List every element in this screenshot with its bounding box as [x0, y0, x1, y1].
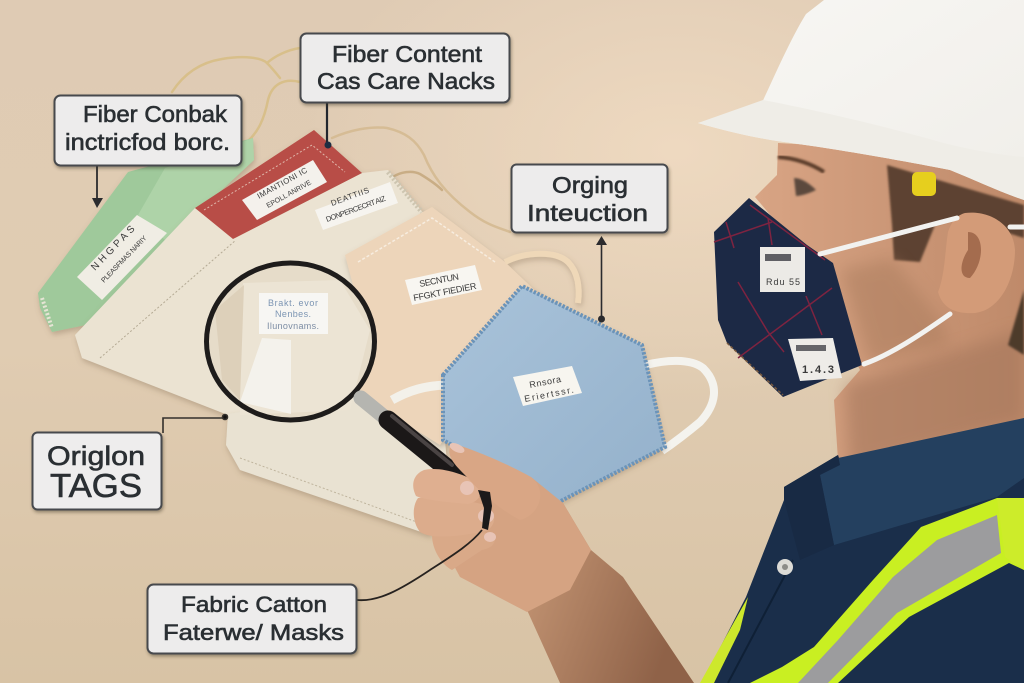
peach mask label [405, 265, 482, 305]
ear loops [820, 218, 1024, 364]
dark mask label top: Rdu 55 [766, 277, 800, 287]
dark mask label bottom [788, 338, 842, 381]
callout: Fabric Catton: Faterwe/ Masks [163, 620, 344, 645]
palm [440, 477, 591, 612]
callout: Origlon Tags [32, 432, 162, 510]
placket [728, 560, 793, 683]
lens label: Nenbes. [275, 309, 311, 319]
connector: Fabric Cotton cable [357, 530, 482, 600]
ring finger [432, 530, 495, 570]
blue mask label: Rnsora [528, 374, 562, 390]
callout: Orging Inteuction: Orging [552, 172, 628, 198]
dark mask label top [760, 247, 805, 292]
connector: Origlon tags [163, 414, 228, 433]
denim shirt [702, 418, 1024, 683]
blue mask label [513, 366, 582, 406]
eye and brow [778, 157, 824, 196]
callout: Orging Inteuction [512, 164, 668, 322]
callout: Fiber Content: Fiber Content [332, 41, 483, 67]
dark fabric mask [714, 198, 862, 397]
handle end in hand [478, 490, 492, 530]
blue mask label: Eriertssr. [523, 385, 574, 404]
lens label: Brakt. evor [268, 298, 318, 308]
hair [887, 165, 1024, 262]
callout: Fabric Catton: Fabric Catton [181, 592, 327, 617]
cream mask label: DEATTIIS [330, 186, 370, 208]
stubble [840, 258, 950, 362]
handle [388, 416, 480, 495]
index finger [413, 469, 481, 504]
lens label [259, 293, 328, 334]
button [777, 559, 793, 575]
callout: Fiber Content [300, 34, 510, 148]
peach mask label: FFGKT FIEDIER [412, 281, 478, 303]
ear [938, 213, 1015, 313]
red band label: IMANTIONI IC [256, 166, 309, 201]
callout: Fiber Content: Cas Care Nacks [317, 68, 495, 94]
thumb [449, 443, 540, 520]
middle finger [414, 497, 494, 537]
blue fabric mask [392, 286, 714, 503]
lens [206, 262, 376, 420]
fingernails [448, 441, 496, 542]
head and neck [755, 143, 1024, 490]
yellow clip [912, 172, 936, 196]
arm [527, 503, 694, 683]
green mask label: NHGPAS [89, 223, 138, 273]
cream mask label: DONPERCECRT AIZ [325, 194, 387, 224]
callout: Fiber Conbak: Fiber Conbak [83, 101, 228, 127]
peach mask label: SECNTUN [418, 272, 460, 289]
red band label [242, 160, 327, 220]
callout: Origlon Tags: Origlon [47, 441, 145, 471]
callout: Fiber Conbak: inctricfod borc. [65, 129, 230, 155]
lower cream mask [226, 395, 450, 535]
lens label: Ilunovnams. [267, 321, 319, 331]
cream fabric mask with red band [75, 130, 440, 415]
collar [820, 418, 1024, 545]
peach fabric mask [345, 207, 579, 445]
green fabric mask [38, 138, 254, 332]
dark mask label bottom: 1.4.3 [802, 364, 834, 376]
callout: Origlon Tags: TAGS [50, 467, 142, 504]
hard hat [698, 0, 1024, 200]
neck shadow [845, 330, 1024, 470]
lens ring [206, 263, 374, 420]
callout: Fabric Catton [148, 584, 356, 654]
green mask label [77, 215, 167, 300]
callout: Orging Inteuction: Inteuction [527, 200, 648, 226]
magnifying glass [206, 262, 480, 495]
worker arm and hand [413, 441, 694, 683]
callout: Fiber Conbak [54, 96, 242, 208]
mask straps: tan ear loops [172, 48, 510, 232]
green mask label: PLEASFMAS NARIY [100, 235, 149, 284]
hi-vis safety strap [700, 498, 1024, 683]
worker figure [698, 0, 1024, 683]
cream mask label [315, 182, 398, 230]
metal collar [361, 398, 383, 416]
red band label: EPOLL ANRIVE [266, 179, 313, 210]
